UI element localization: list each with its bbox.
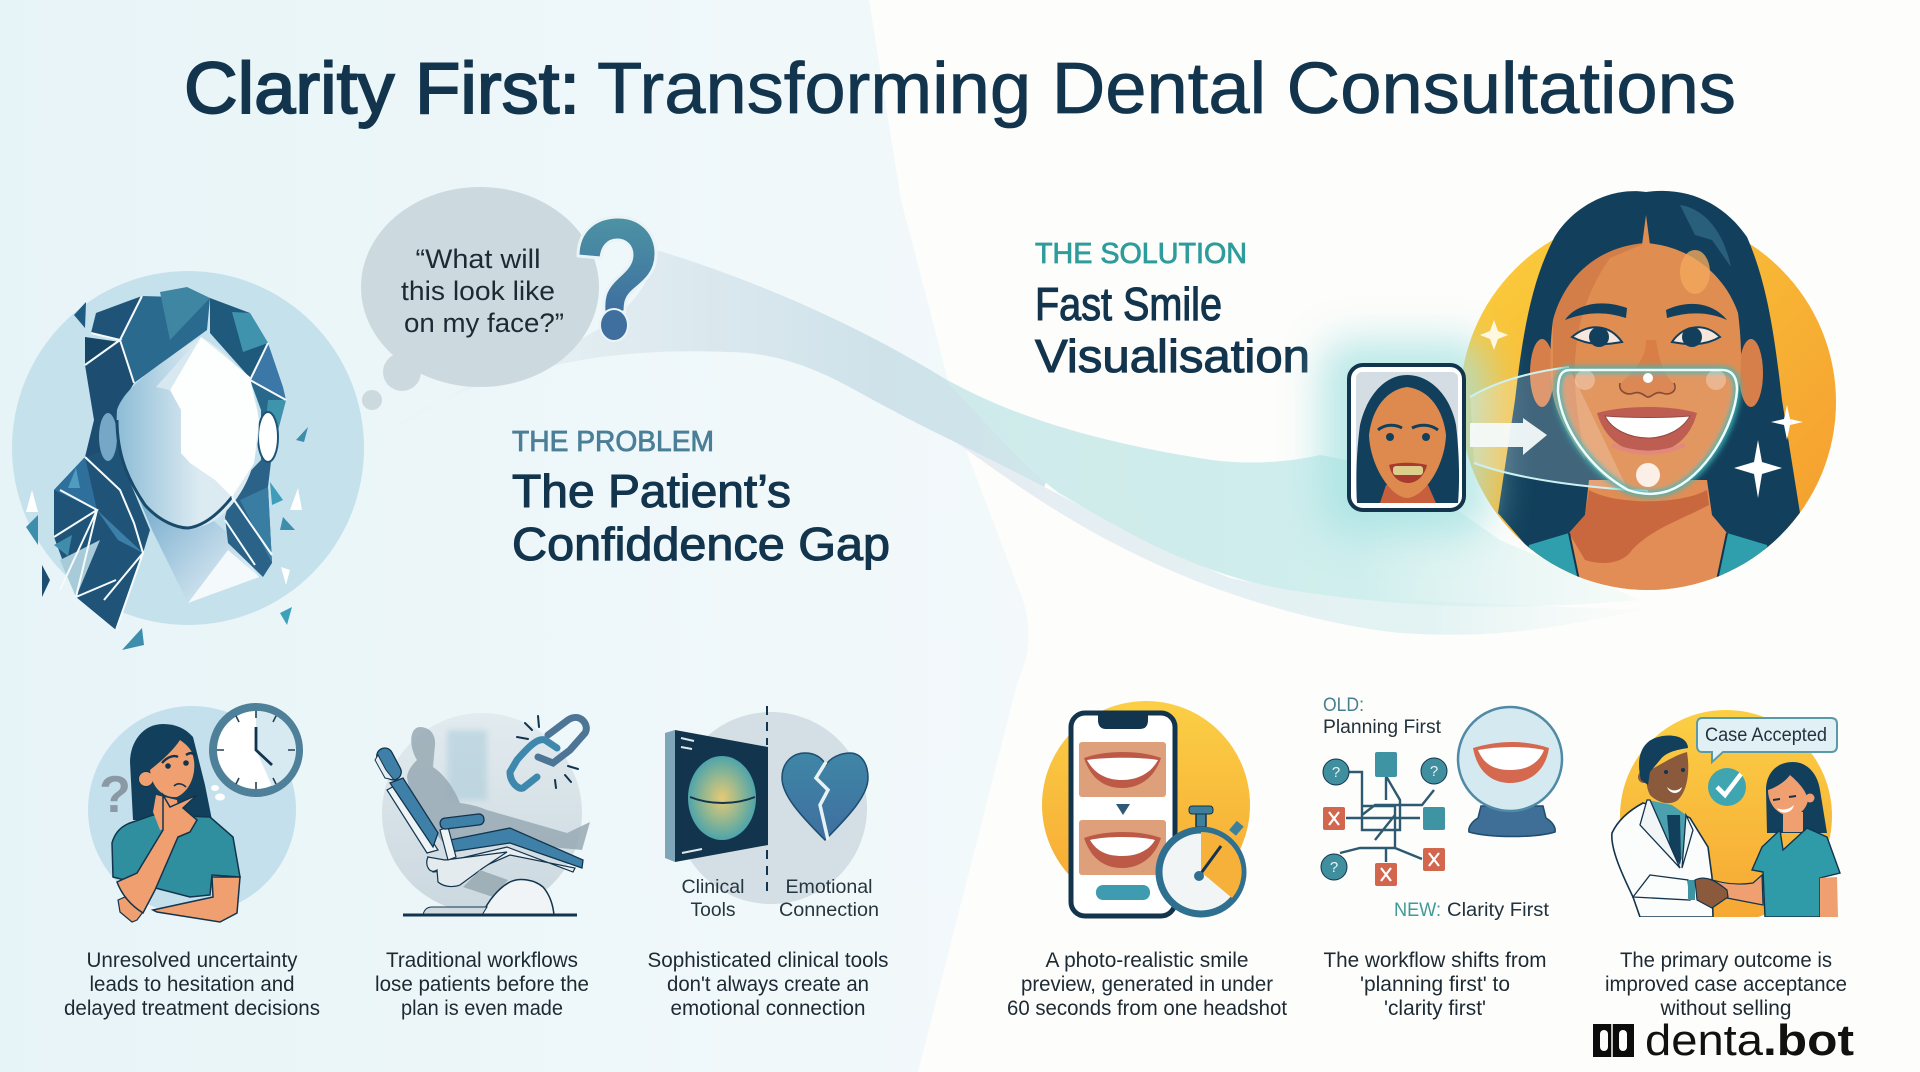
icon: clinical tools versus emotional connection: Emotional: [786, 876, 872, 898]
illustration: smiling woman with glass overlay: [1460, 191, 1836, 595]
caption: smile preview: [1007, 949, 1287, 1020]
logo: denta.bot: [1593, 1016, 1854, 1065]
caption: smile preview: preview, generated in under: [1021, 973, 1273, 996]
icon: dental chair with broken link: [374, 713, 590, 915]
problem heading: The Patient’s: [512, 465, 791, 517]
icon: worried person with clock: [88, 706, 299, 922]
icon: old versus new workflow: NEW:: [1394, 900, 1441, 921]
caption: smile preview: A photo-realistic smile: [1046, 949, 1248, 972]
logo: denta.bot: .bot: [1763, 1016, 1854, 1065]
icon: old versus new workflow: ?: [1330, 859, 1338, 876]
title: Clarity First:: [184, 49, 580, 129]
caption: clinical tools: Sophisticated clinical tools: [648, 949, 888, 972]
speech bubble with question: on my face?”: [404, 308, 564, 338]
caption: clinical tools: emotional connection: [670, 997, 866, 1020]
caption: uncertainty: leads to hesitation and: [90, 973, 294, 996]
icon: phone with smile preview and stopwatch: [1042, 701, 1250, 916]
icon: question mark: [578, 217, 656, 341]
icon: old versus new workflow: [1321, 695, 1562, 921]
sparkles: [1480, 320, 1803, 498]
caption: case acceptance: without selling: [1660, 997, 1792, 1020]
icon: old versus new workflow: Clarity First: [1447, 900, 1550, 921]
icon: old versus new workflow: ?: [1332, 764, 1340, 781]
icon: old versus new workflow: Planning First: [1323, 717, 1442, 738]
caption: uncertainty: [64, 949, 320, 1020]
solution heading: Visualisation: [1035, 330, 1310, 382]
caption: clinical tools: [648, 949, 888, 1020]
speech bubble with question: “What will: [416, 244, 540, 274]
icon: worried person with clock: ?: [99, 766, 131, 824]
title: Transforming Dental Consultations: [597, 49, 1736, 129]
icon: doctor and patient handshake: [1612, 710, 1840, 922]
icon: old versus new workflow: ?: [1430, 763, 1438, 780]
speech bubble with question: this look like: [401, 276, 555, 306]
caption: case acceptance: The primary outcome is: [1620, 949, 1832, 972]
caption: uncertainty: delayed treatment decisions: [64, 997, 320, 1020]
illustration: fractured faceless patient: [12, 271, 364, 650]
caption: workflows: plan is even made: [401, 997, 563, 1020]
caption: workflow shift: The workflow shifts from: [1324, 949, 1546, 972]
icon: clinical tools versus emotional connection: Tools: [690, 899, 736, 921]
caption: workflows: Traditional workflows: [386, 949, 578, 972]
problem heading: [512, 426, 890, 570]
problem heading: THE PROBLEM: [512, 426, 714, 458]
icon: clinical tools versus emotional connection: Clinical: [682, 876, 744, 898]
icon: doctor and patient handshake: Case Accepted: [1705, 725, 1827, 746]
speech bubble with question: [361, 187, 599, 410]
caption: workflow shift: 'planning first' to: [1360, 973, 1510, 996]
solution heading: Fast Smile: [1035, 278, 1222, 330]
callout: thumbnail of original photo: [1320, 340, 1490, 535]
icon: clinical tools versus emotional connection: [665, 706, 879, 921]
caption: workflows: lose patients before the: [375, 973, 589, 996]
caption: workflow shift: [1324, 949, 1546, 1020]
problem heading: Confiddence Gap: [512, 518, 890, 570]
icon: old versus new workflow: OLD:: [1323, 695, 1364, 716]
solution heading: [1035, 238, 1310, 382]
glass overlay and transformation arrow: [1470, 367, 1737, 494]
caption: uncertainty: Unresolved uncertainty: [86, 949, 298, 972]
caption: case acceptance: improved case acceptance: [1605, 973, 1847, 996]
caption: smile preview: 60 seconds from one headshot: [1007, 997, 1287, 1020]
caption: workflows: [375, 949, 589, 1020]
caption: workflow shift: 'clarity first': [1384, 997, 1486, 1020]
solution heading: THE SOLUTION: [1035, 238, 1247, 270]
icon: clinical tools versus emotional connection: Connection: [779, 899, 879, 921]
caption: clinical tools: don't always create an: [667, 973, 869, 996]
caption: case acceptance: [1605, 949, 1847, 1020]
logo: denta.bot: denta: [1645, 1016, 1764, 1065]
flowing ribbon connecting problem to solution: [370, 250, 1640, 635]
